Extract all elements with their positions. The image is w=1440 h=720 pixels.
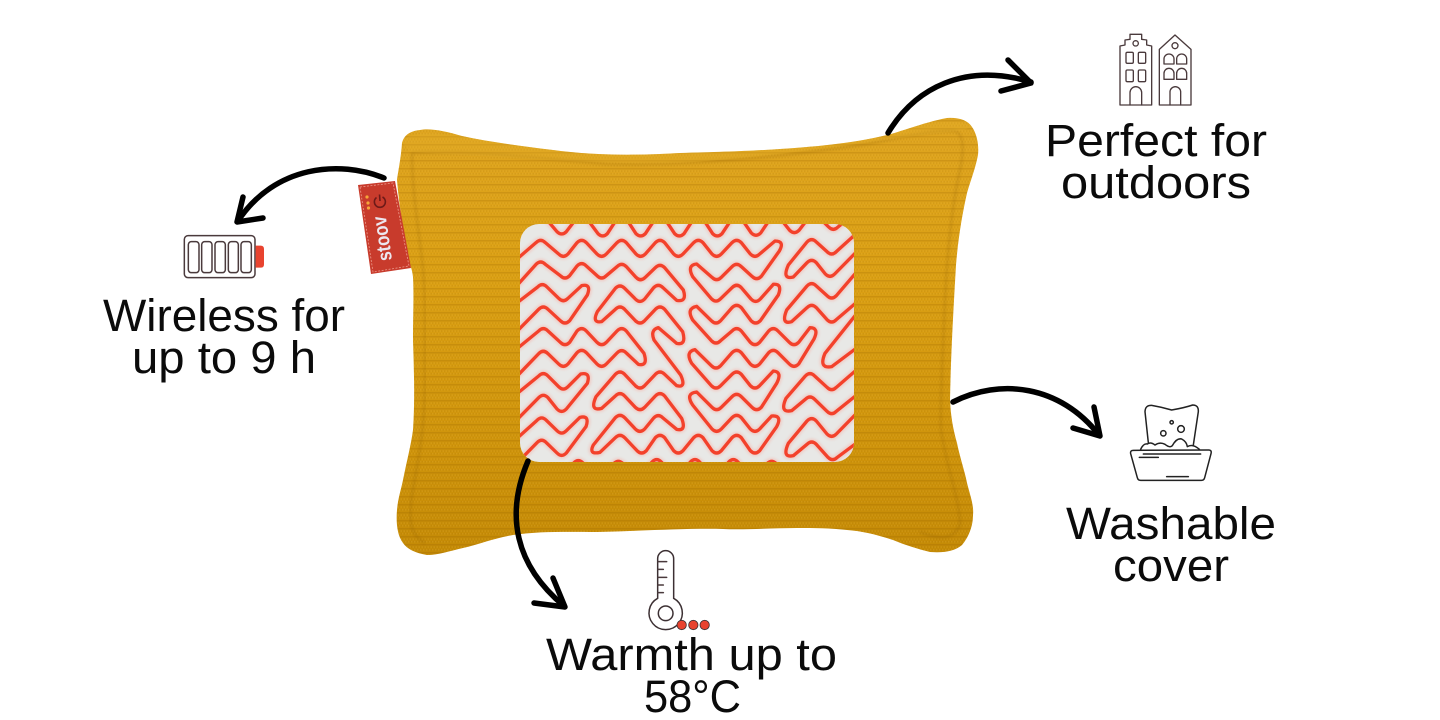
arrow: tag to battery: [237, 169, 384, 222]
heading: perfect for outdoors: outdoors: [1061, 157, 1251, 208]
heading: washable cover: [1066, 498, 1276, 591]
heading: warmth: Warmth up to: [546, 629, 837, 680]
heating wire pattern: [520, 224, 854, 462]
heading: wireless: Wireless for: [103, 290, 345, 341]
knit texture and seams: [390, 110, 990, 560]
heading: washable cover: cover: [1113, 540, 1229, 591]
panel: cushion: [358, 110, 990, 560]
cushion body: [397, 118, 978, 555]
icon: wash basin: [1131, 405, 1211, 480]
arrow: top right to outdoors: [888, 60, 1031, 133]
icon: houses: [1120, 34, 1191, 105]
heating panel window: [520, 224, 854, 462]
arrow: bottom to warmth: [516, 461, 565, 607]
heading: washable cover: Washable: [1066, 498, 1276, 549]
icon: thermometer: [649, 551, 709, 630]
heading: perfect for outdoors: [1045, 115, 1267, 208]
heading: wireless: [103, 290, 345, 383]
icon: battery: [184, 236, 264, 278]
red side tag: stoov: [369, 214, 397, 262]
arrow: right to washable: [953, 389, 1100, 436]
heading: perfect for outdoors: Perfect for: [1045, 115, 1267, 166]
red side tag: [358, 181, 411, 274]
heading: warmth: [546, 629, 837, 720]
heading: wireless: up to 9 h: [132, 332, 316, 383]
